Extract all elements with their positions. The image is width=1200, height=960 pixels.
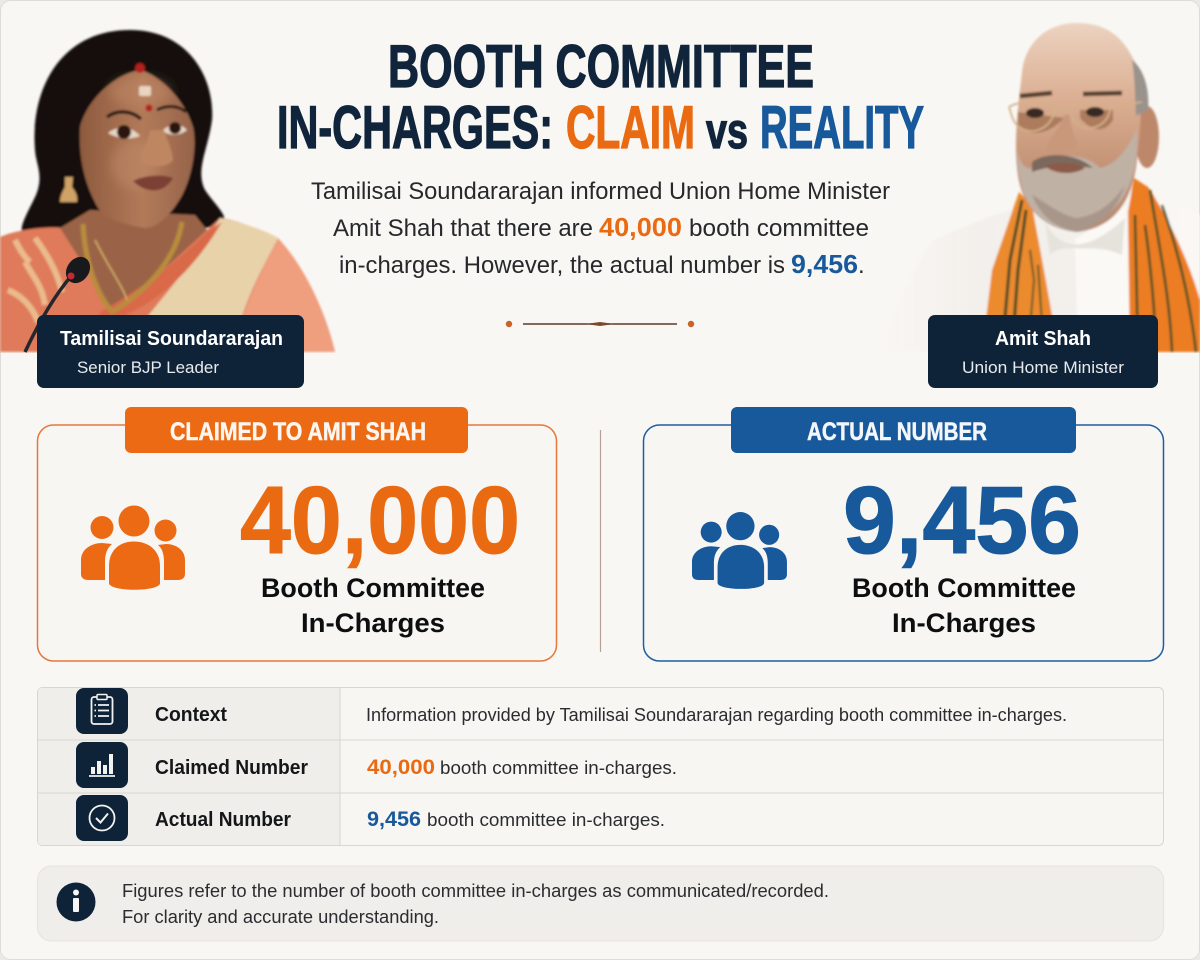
microphone bbox=[25, 252, 95, 352]
title: CLAIM bbox=[566, 94, 695, 161]
row: claimed number bbox=[76, 742, 677, 788]
portrait: Tamilisai Soundararajan bbox=[0, 30, 335, 352]
title: REALITY bbox=[760, 94, 924, 161]
label: booth committee in-charges bbox=[852, 573, 1076, 638]
title bbox=[277, 33, 924, 161]
note text: Figures refer to the number of booth committee in-charges as communicated/recorded. bbox=[122, 881, 829, 901]
row: actual number: Actual Number bbox=[155, 809, 291, 831]
row: actual number bbox=[76, 795, 665, 841]
intro text bbox=[311, 178, 890, 279]
label: booth committee in-charges bbox=[261, 573, 485, 638]
name plate: Amit Shah: Amit Shah bbox=[995, 328, 1091, 350]
row: claimed number: Claimed Number bbox=[155, 757, 308, 779]
note text bbox=[122, 881, 829, 927]
icon: bar chart bbox=[76, 742, 128, 788]
title: BOOTH COMMITTEE bbox=[388, 33, 814, 100]
intro text: 40,000 bbox=[599, 212, 682, 242]
label: booth committee in-charges: In-Charges bbox=[892, 608, 1036, 638]
tab: actual number: ACTUAL NUMBER bbox=[807, 418, 987, 446]
label: booth committee in-charges: Booth Committee bbox=[261, 573, 485, 603]
note box bbox=[38, 866, 1164, 941]
name plate: Tamilisai Soundararajan: Senior BJP Leader bbox=[77, 358, 219, 377]
figure: 9,456: 9,456 bbox=[843, 467, 1081, 574]
figure: 40,000: 40,000 bbox=[240, 467, 520, 574]
row: actual number: booth committee in-charges. bbox=[427, 810, 665, 830]
icon: clipboard bbox=[76, 688, 128, 734]
table: summary bbox=[38, 688, 1164, 846]
row: claimed number: booth committee in-charges. bbox=[440, 758, 677, 778]
tab: claimed to Amit Shah bbox=[125, 407, 468, 453]
tab: claimed to Amit Shah: CLAIMED TO AMIT SHAH bbox=[170, 418, 426, 446]
name plate: Tamilisai Soundararajan bbox=[37, 315, 304, 388]
name plate: Amit Shah: Union Home Minister bbox=[962, 358, 1124, 377]
icon: people blue bbox=[692, 512, 787, 589]
icon: info bbox=[56, 882, 96, 922]
row: context: Information provided by Tamilisai Soundararajan regarding booth committee in-charges. bbox=[366, 705, 1067, 725]
tab: actual number bbox=[731, 407, 1076, 453]
panel: actual bbox=[644, 407, 1164, 661]
intro text: Tamilisai Soundararajan informed Union Home Minister bbox=[311, 178, 890, 205]
name plate: Tamilisai Soundararajan: Tamilisai Soundararajan bbox=[60, 328, 283, 350]
icon: check circle bbox=[76, 795, 128, 841]
label: booth committee in-charges: In-Charges bbox=[301, 608, 445, 638]
name plate: Amit Shah bbox=[928, 315, 1158, 388]
intro text: . bbox=[858, 252, 865, 279]
title: IN-CHARGES: bbox=[277, 94, 553, 161]
intro text: booth committee bbox=[689, 215, 869, 242]
intro text: Amit Shah that there are bbox=[333, 215, 593, 242]
ornamental divider bbox=[506, 321, 694, 327]
portrait: Amit Shah bbox=[968, 22, 1200, 353]
row: context: Context bbox=[155, 704, 227, 726]
row: context bbox=[76, 688, 1067, 734]
label: booth committee in-charges: Booth Committee bbox=[852, 573, 1076, 603]
icon: people orange bbox=[81, 506, 185, 590]
intro text: in-charges. However, the actual number is bbox=[339, 252, 785, 279]
panel: claimed bbox=[38, 407, 556, 661]
intro text: 9,456 bbox=[791, 249, 858, 279]
note text: For clarity and accurate understanding. bbox=[122, 907, 439, 927]
row: actual number: 9,456 bbox=[367, 808, 421, 831]
title: vs bbox=[706, 103, 748, 159]
row: claimed number: 40,000 bbox=[367, 756, 435, 779]
